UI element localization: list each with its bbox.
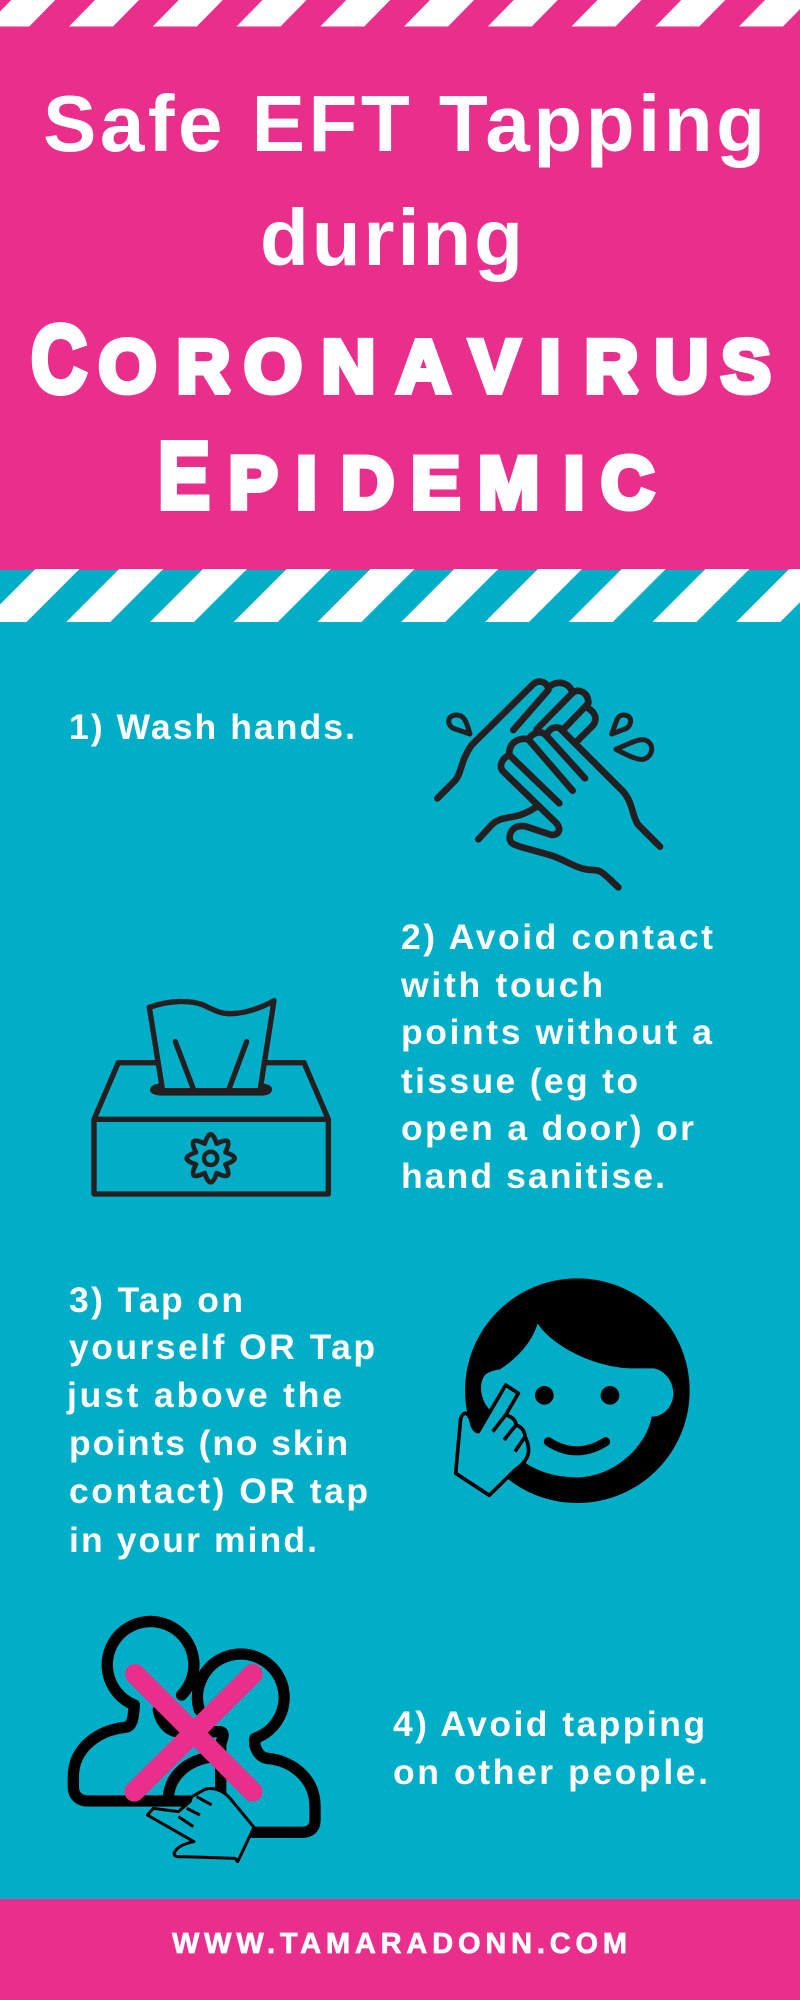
top white stripes — [0, 0, 800, 26]
step 2 text: avoid contact: hand sanitise. — [401, 1156, 665, 1196]
footer band with website — [0, 1899, 800, 2000]
title line: Coronavirus: C — [31, 306, 87, 413]
step 3 text: tap on yourself: in your mind. — [69, 1520, 317, 1560]
step 2 text: avoid contact: 2) Avoid contact — [401, 917, 713, 957]
title line: Safe EFT Tapping: Safe EFT Tapping — [43, 79, 765, 168]
title line: during: during — [260, 193, 523, 282]
step 3 text: tap on yourself: just above the — [66, 1375, 342, 1415]
step 2 text: avoid contact: with touch — [400, 965, 603, 1005]
title line: Epidemic: E — [158, 423, 210, 529]
step 2 text: avoid contact: points without a — [401, 1012, 712, 1052]
step 4 text: avoid tapping on others — [393, 1704, 708, 1792]
step 3 text: tap on yourself: 3) Tap on — [69, 1280, 243, 1320]
step 2 text: avoid contact: open a door) or — [401, 1108, 694, 1148]
title line: Epidemic: pidemic — [229, 415, 654, 531]
step 2 text: avoid contact: tissue (eg to — [401, 1061, 638, 1101]
icon: smiling face with tapping hand — [456, 1278, 690, 1503]
step 1 text: wash hands: 1) Wash hands. — [69, 707, 355, 747]
divider stripes band — [0, 569, 800, 622]
icon: washing hands — [437, 682, 660, 887]
website url: WWW.TAMARADONN.COM — [172, 1928, 627, 1960]
step 4 text: avoid tapping on others: on other people. — [393, 1752, 708, 1792]
step 3 text: tap on yourself: contact) OR tap — [69, 1471, 368, 1511]
title line: Coronavirus: oronavirus — [99, 297, 771, 415]
step 3 text: tap on yourself: points (no skin — [69, 1423, 348, 1463]
step 3 text: tap on yourself — [66, 1280, 375, 1560]
icon: tissue box — [94, 1001, 328, 1194]
step 2 text: avoid contact — [400, 917, 713, 1196]
step 4 text: avoid tapping on others: 4) Avoid tapping — [393, 1704, 705, 1744]
step 3 text: tap on yourself: yourself OR Tap — [69, 1327, 375, 1367]
icon: people crossed out with hand — [73, 1621, 315, 1862]
panel: teal body background — [0, 569, 800, 1900]
panel: pink header — [0, 0, 800, 570]
